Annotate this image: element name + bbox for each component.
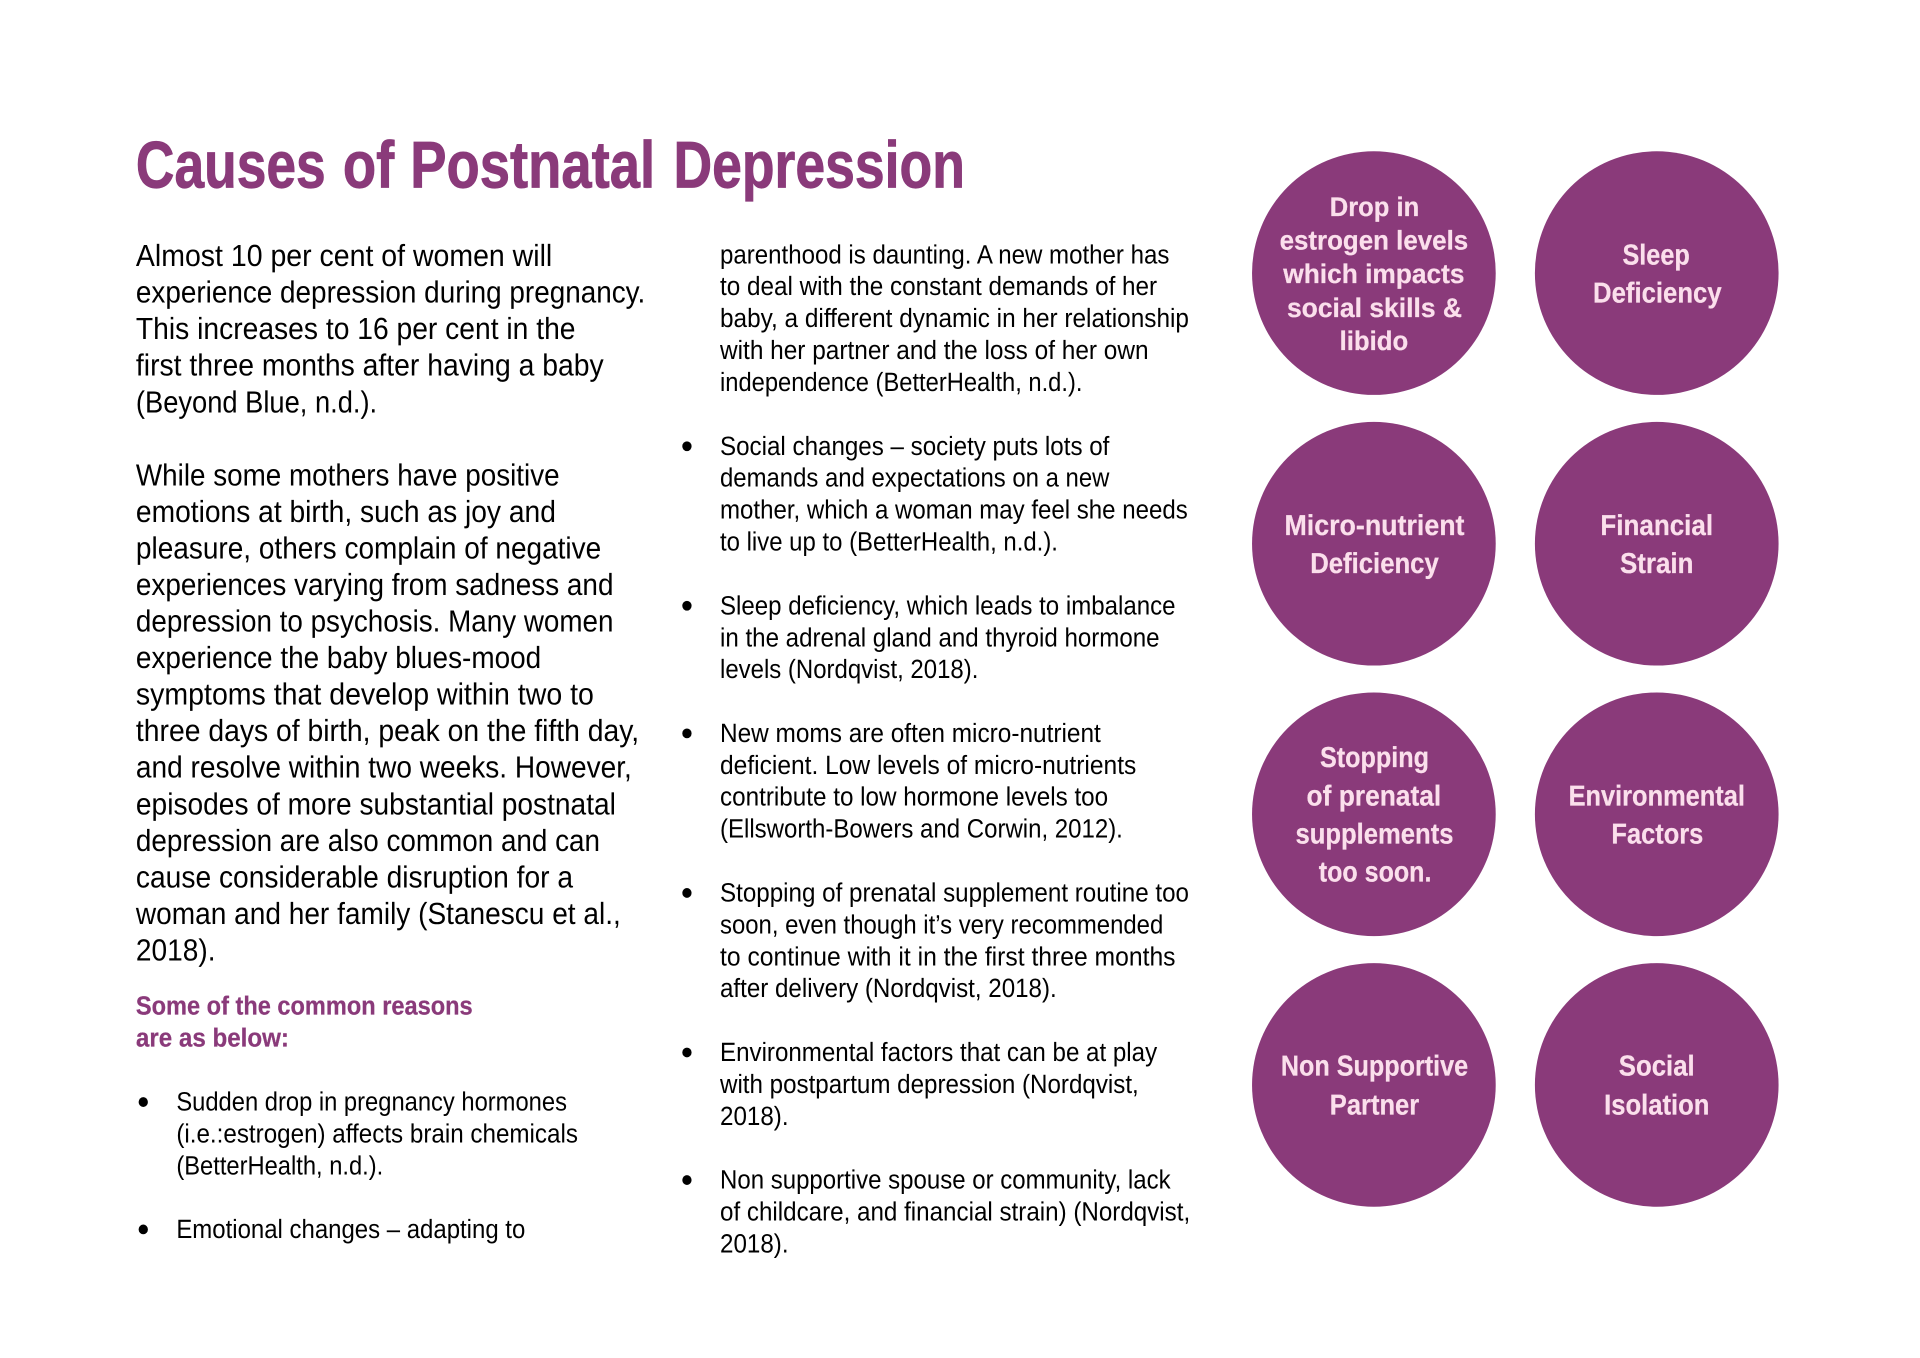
bullet list: left column xyxy=(139,1086,578,1244)
bullet list: middle column: to continue with it in the first three months xyxy=(720,941,1176,972)
circle: non supportive partner: Non Supportive xyxy=(1281,1050,1468,1082)
bullet list: middle column: contribute to low hormone levels too xyxy=(720,781,1108,812)
bullet list: middle column: baby, a different dynamic in her relationship xyxy=(720,303,1189,333)
subheading: common reasons xyxy=(136,991,473,1053)
circle: drop in estrogen levels xyxy=(1252,151,1496,395)
circle: stopping of prenatal supplements: too soon. xyxy=(1319,856,1431,888)
text block: second paragraph: symptoms that develop within two to xyxy=(136,678,594,712)
bullet list: middle column: with postpartum depression (Nordqvist, xyxy=(719,1069,1139,1099)
circle: environmental factors: Environmental xyxy=(1569,780,1745,812)
text block: second paragraph: pleasure, others complain of negative xyxy=(136,531,601,566)
bullet list: middle column: soon, even though it’s very recommended xyxy=(720,909,1163,940)
text block: second paragraph: cause considerable disruption for a xyxy=(136,860,573,895)
bullet list: middle column: independence (BetterHealth, n.d.). xyxy=(720,366,1082,397)
circle: micro-nutrient deficiency: Micro-nutrient xyxy=(1284,509,1465,541)
bullet list: middle column: parenthood is daunting. A new mother has xyxy=(720,239,1170,269)
text block: second paragraph: experience the baby blues-mood xyxy=(136,641,541,675)
bullet list: middle column: of childcare, and financial strain) (Nordqvist, xyxy=(720,1196,1190,1227)
bullet list: middle column: 2018). xyxy=(720,1100,789,1131)
text block: intro paragraph: first three months after having a baby xyxy=(136,349,604,383)
bullet list: middle column: deficient. Low levels of micro-nutrients xyxy=(720,749,1137,780)
bullet list: middle column: Social changes – society puts lots of xyxy=(720,430,1110,461)
circle: stopping of prenatal supplements xyxy=(1252,692,1496,936)
text block: second paragraph: woman and her family (Stanescu et al., xyxy=(135,897,621,931)
circle: financial strain: Strain xyxy=(1620,547,1693,579)
bullet list: middle column: mother, which a woman may feel she needs xyxy=(720,494,1188,525)
text block: second paragraph: three days of birth, peak on the fifth day, xyxy=(136,714,639,749)
title: Causes xyxy=(136,129,326,202)
text block: intro paragraph: Almost 10 per cent of women will xyxy=(136,239,552,273)
bullet list: middle column: Sleep deficiency, which leads to imbalance xyxy=(720,590,1176,620)
text block: second paragraph: experiences varying from sadness and xyxy=(136,568,613,602)
circle: drop in estrogen levels: estrogen levels xyxy=(1280,225,1468,256)
bullet list: middle column: New moms are often micro-nutrient xyxy=(720,717,1101,748)
title: Depression xyxy=(673,129,965,202)
circle: social isolation: Isolation xyxy=(1604,1089,1709,1120)
bullet list: left column: Sudden drop in pregnancy hormones xyxy=(176,1086,567,1117)
bullet list: middle column: to live up to (BetterHealth, n.d.). xyxy=(720,526,1058,557)
title: Postnatal xyxy=(410,129,655,202)
circle: micro-nutrient deficiency: Deficiency xyxy=(1310,547,1439,579)
text block: second paragraph: 2018). xyxy=(136,934,216,968)
bullet list: middle column: Non supportive spouse or community, lack xyxy=(720,1164,1171,1195)
text block: second paragraph: depression are also common and can xyxy=(136,824,600,858)
bullet list: middle column: levels (Nordqvist, 2018). xyxy=(720,654,978,684)
bullet list: middle column: demands and expectations on a new xyxy=(720,462,1110,493)
circle: social isolation xyxy=(1535,963,1779,1207)
bullet list: middle column: (Ellsworth-Bowers and Corwin, 2012). xyxy=(720,813,1123,844)
bullet list: left column: (BetterHealth, n.d.). xyxy=(176,1150,383,1180)
bullet list: middle column: Stopping of prenatal supplement routine too xyxy=(720,877,1189,908)
text block: intro paragraph xyxy=(136,239,645,420)
circle: drop in estrogen levels: social skills & xyxy=(1287,292,1462,323)
circle: drop in estrogen levels: which impacts xyxy=(1282,259,1464,289)
circle: non supportive partner xyxy=(1252,963,1496,1207)
bullet list: left column: Emotional changes – adapting to xyxy=(176,1213,525,1244)
subheading: common reasons: are as below: xyxy=(136,1023,289,1053)
bullet list: middle column xyxy=(682,239,1190,1259)
text block: second paragraph: While some mothers have positive xyxy=(136,458,560,493)
subheading: common reasons: Some of the common reasons xyxy=(136,991,473,1021)
circle: social isolation: Social xyxy=(1619,1050,1695,1082)
circle: non supportive partner: Partner xyxy=(1330,1089,1419,1120)
circle: sleep deficiency: Deficiency xyxy=(1593,277,1722,309)
circle: financial strain: Financial xyxy=(1600,509,1713,541)
text block: second paragraph: depression to psychosis. Many women xyxy=(136,605,613,639)
circle: sleep deficiency xyxy=(1535,151,1779,395)
bullet list: middle column: 2018). xyxy=(720,1228,789,1259)
bullet list: middle column: after delivery (Nordqvist, 2018). xyxy=(720,973,1057,1003)
text block: intro paragraph: This increases to 16 per cent in the xyxy=(136,312,576,347)
text block: second paragraph: emotions at birth, such as joy and xyxy=(136,495,556,529)
bullet list: middle column: to deal with the constant demands of her xyxy=(720,271,1157,301)
text block: second paragraph xyxy=(135,458,639,968)
text block: intro paragraph: experience depression during pregnancy. xyxy=(136,276,645,310)
bullet list: middle column: Environmental factors that can be at play xyxy=(720,1037,1157,1067)
title: of xyxy=(343,129,395,202)
circle: environmental factors: Factors xyxy=(1611,818,1703,850)
bullet list: middle column: with her partner and the loss of her own xyxy=(719,335,1149,365)
text block: intro paragraph: (Beyond Blue, n.d.). xyxy=(136,385,377,420)
circle: drop in estrogen levels: libido xyxy=(1340,326,1408,356)
circle: stopping of prenatal supplements: of prenatal xyxy=(1307,780,1441,812)
bullet list: left column: (i.e.:estrogen) affects brain chemicals xyxy=(176,1118,578,1149)
circle: stopping of prenatal supplements: Stopping xyxy=(1320,741,1429,773)
circle: micro-nutrient deficiency xyxy=(1252,422,1496,666)
circle: sleep deficiency: Sleep xyxy=(1622,239,1690,271)
bullet list: middle column: in the adrenal gland and thyroid hormone xyxy=(720,622,1160,652)
circle: environmental factors xyxy=(1535,692,1779,936)
circle: stopping of prenatal supplements: supplements xyxy=(1296,818,1453,850)
circle: financial strain xyxy=(1535,422,1779,666)
text block: second paragraph: episodes of more substantial postnatal xyxy=(136,787,616,822)
text block: second paragraph: and resolve within two weeks. However, xyxy=(136,751,632,785)
circle: drop in estrogen levels: Drop in xyxy=(1330,191,1419,222)
